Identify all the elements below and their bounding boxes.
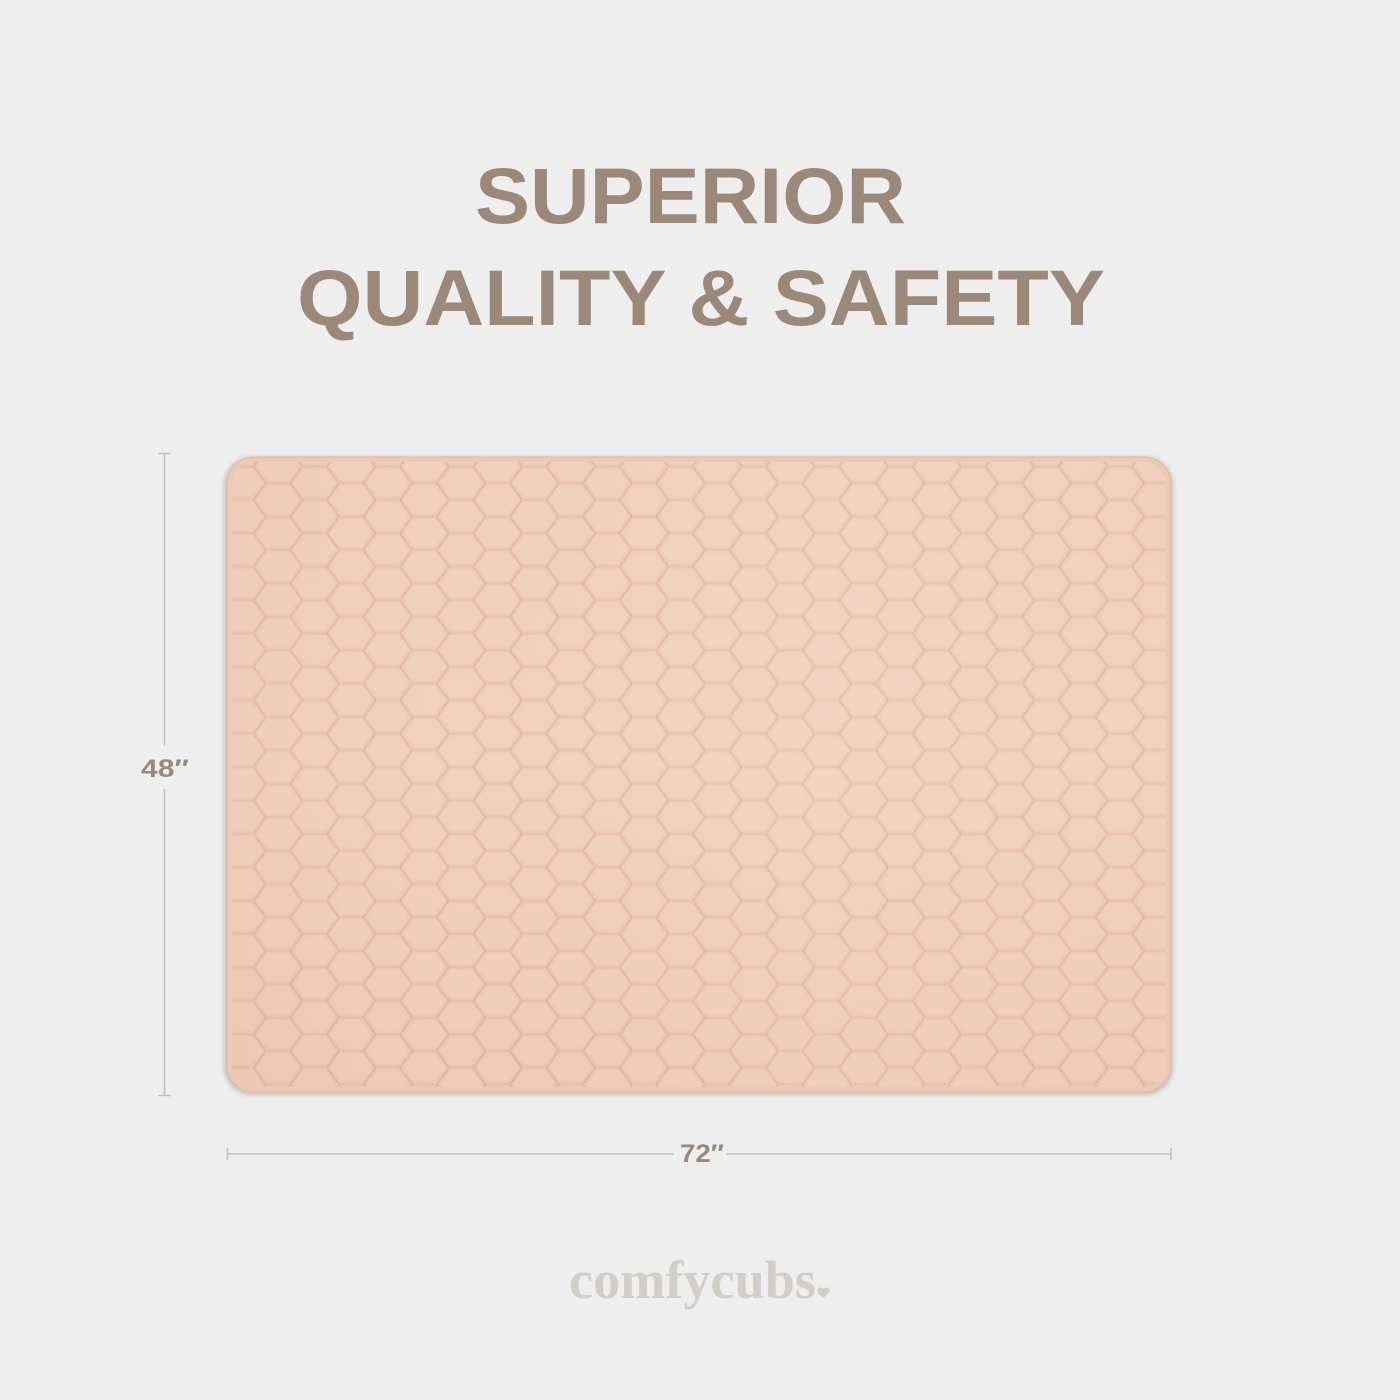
- hexagon quilting: [232, 462, 1166, 1087]
- title: QUALITY & SAFETY: [297, 253, 1105, 342]
- height dimension: 48 inches: [141, 454, 189, 1096]
- width dimension: 72 inches: 72″: [680, 1140, 724, 1168]
- brand logo: comfycubs: [569, 1250, 816, 1310]
- title: SUPERIOR: [475, 151, 906, 240]
- width dimension: 72 inches: [228, 1140, 1171, 1168]
- mat edge: [227, 457, 1171, 1092]
- mat shadow: [224, 457, 1173, 1095]
- icon: heart: [817, 1287, 830, 1298]
- quilted play mat: [224, 457, 1173, 1095]
- title: [297, 151, 1105, 342]
- height dimension: 48 inches: 48″: [141, 755, 189, 783]
